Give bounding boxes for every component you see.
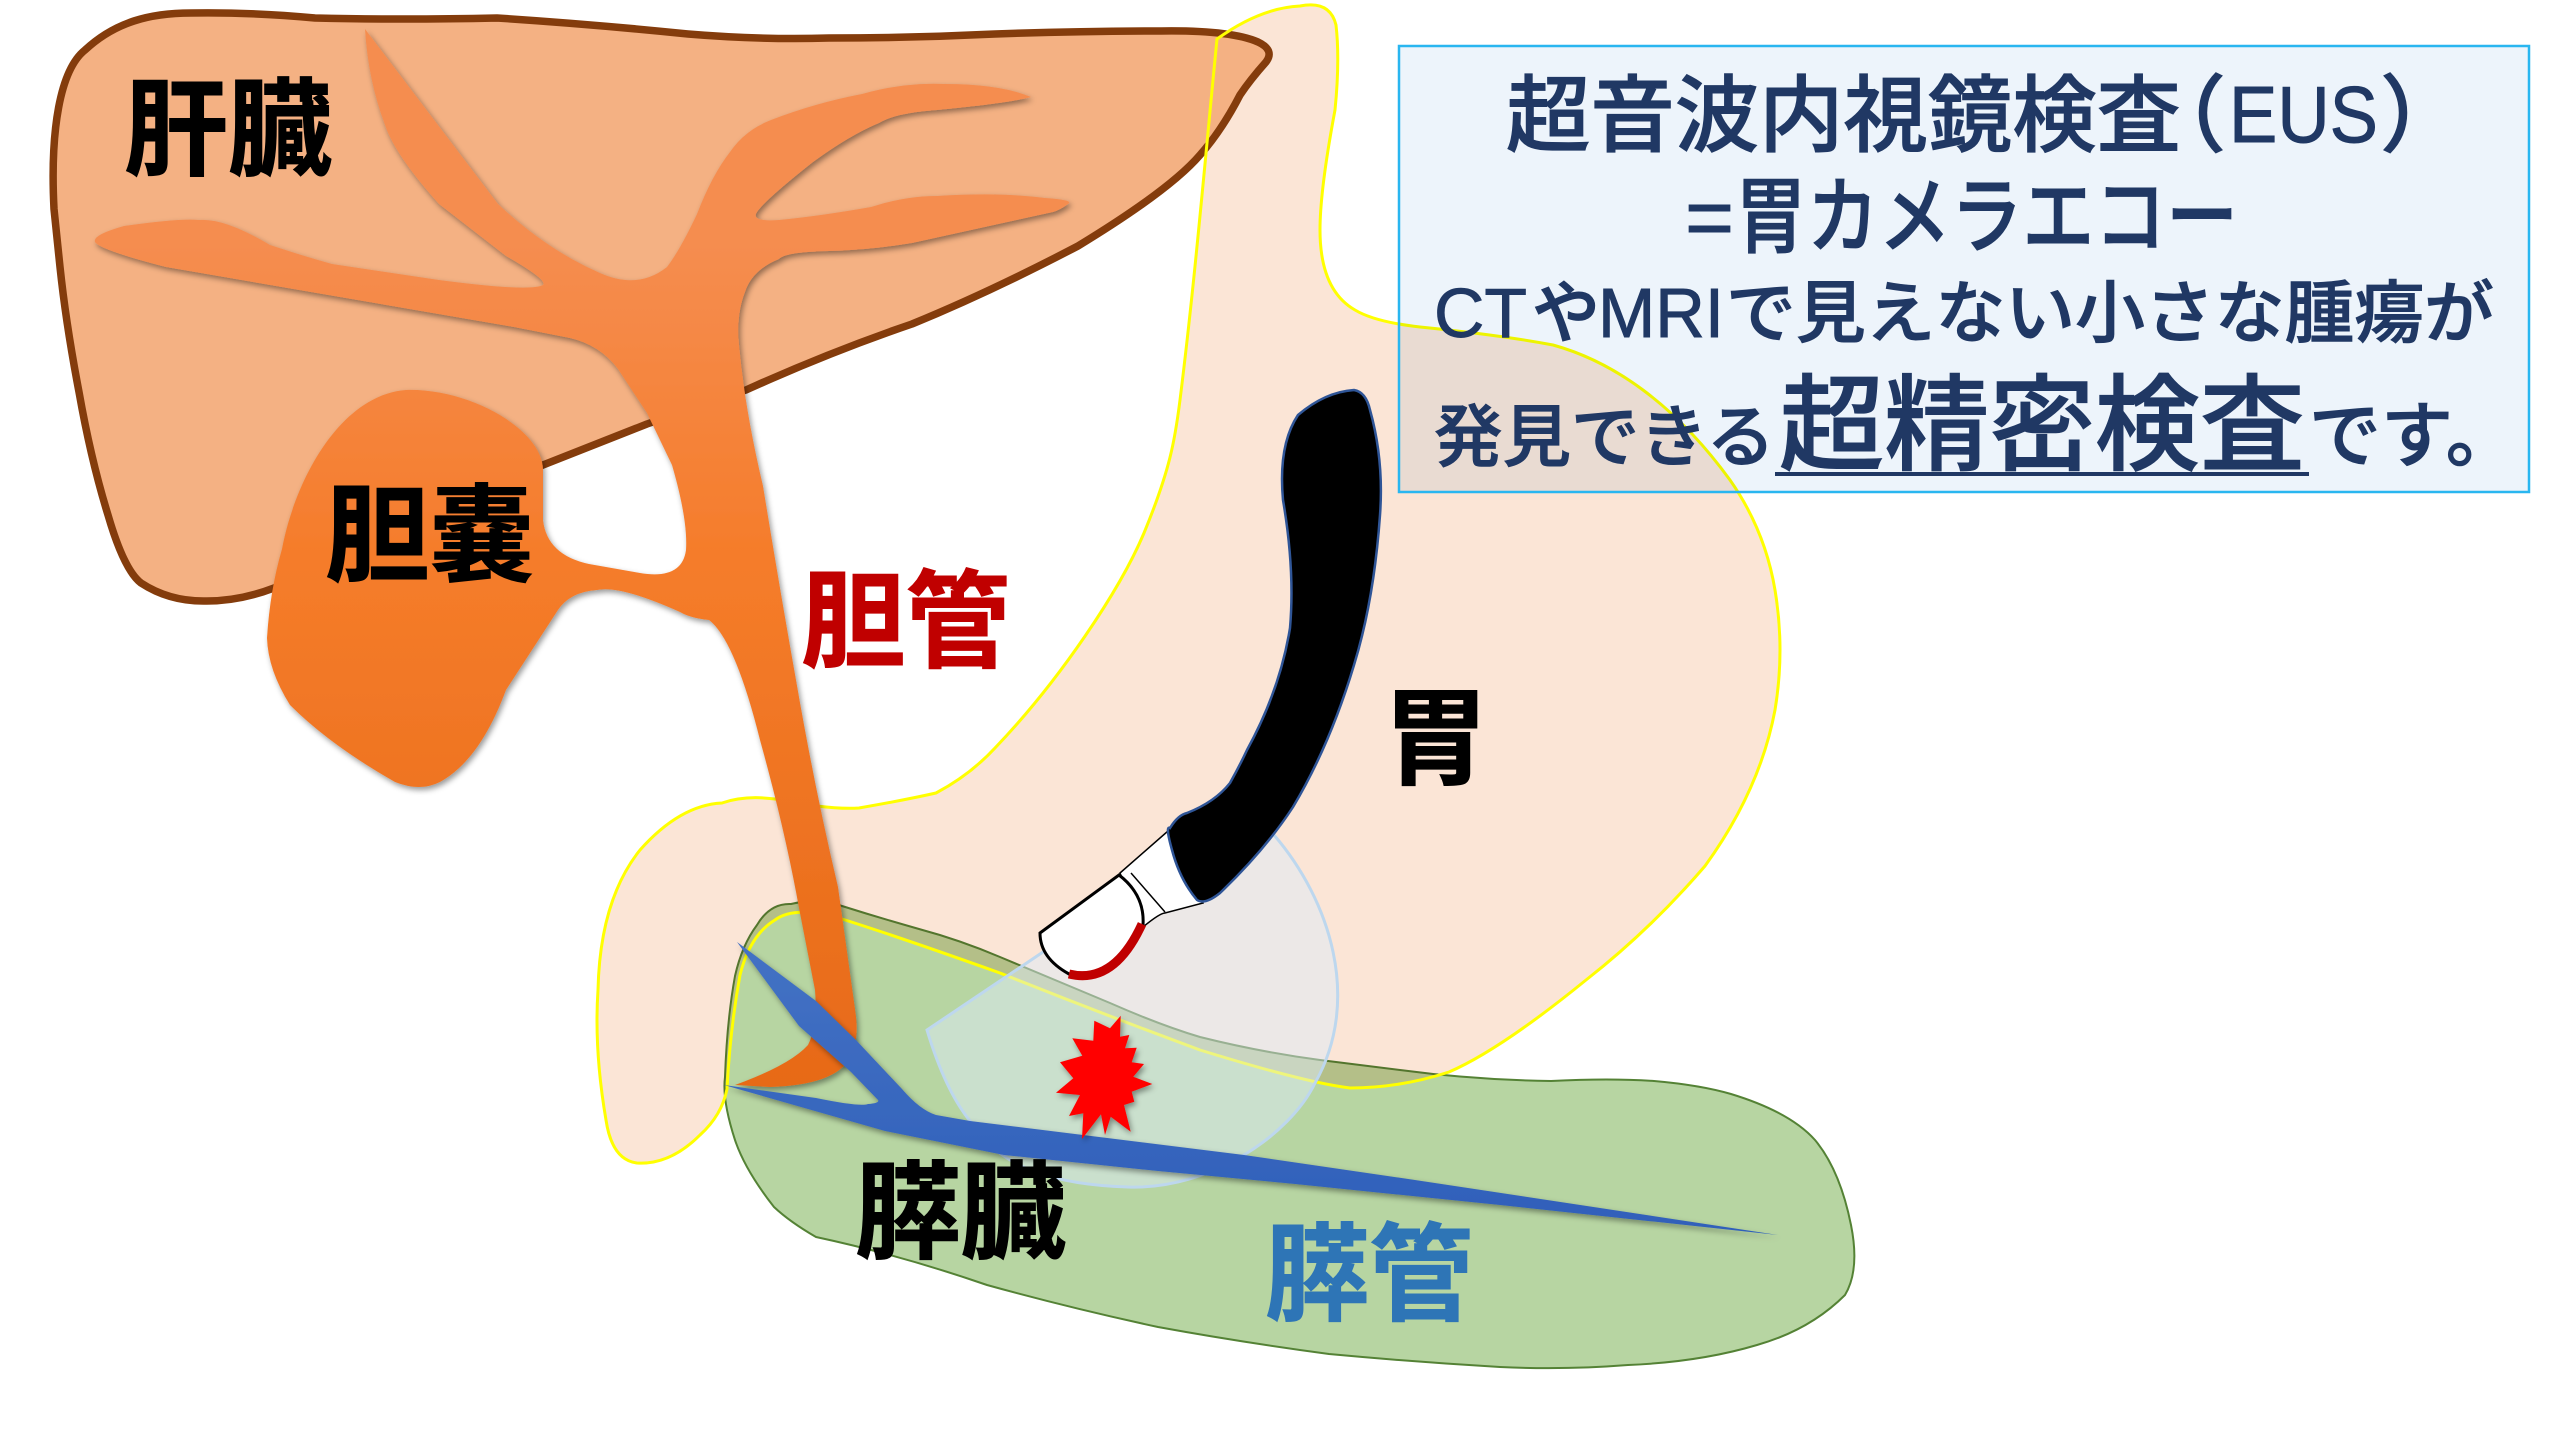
heading line 1: （ xyxy=(2142,69,2226,163)
endoscope neck xyxy=(1120,831,1203,927)
body line 3: MRI xyxy=(1598,274,1724,352)
heading line 2: = xyxy=(1685,170,1734,264)
label: bile duct: 胆管 xyxy=(801,564,1010,682)
body line 3: や xyxy=(1532,276,1600,352)
body line 4: 超精密検査 xyxy=(1779,368,2305,485)
body line 4: 発見できる xyxy=(1434,400,1775,476)
heading line 1: 超音波内視鏡検査 xyxy=(1506,69,2181,163)
info box xyxy=(1399,46,2529,492)
body line 4: です。 xyxy=(2309,397,2518,477)
label: stomach: 胃 xyxy=(1383,681,1489,799)
endoscope head xyxy=(1040,875,1143,976)
body line 4 xyxy=(1434,368,2518,485)
body line 3: CT xyxy=(1434,274,1527,352)
bile duct and gallbladder xyxy=(95,29,1069,1087)
pancreas xyxy=(724,901,1854,1368)
body line 3: で見えない小さな腫瘍が xyxy=(1726,276,2494,352)
heading line 2: 胃カメラエコー xyxy=(1735,170,2238,264)
pancreatic duct xyxy=(724,942,1778,1235)
endoscope xyxy=(1040,390,1381,976)
heading line 1: ） xyxy=(2380,69,2464,163)
label: liver: 肝臓 xyxy=(124,72,332,190)
stomach fill xyxy=(597,5,1780,1163)
label: gallbladder: 胆嚢 xyxy=(325,478,534,596)
ultrasound sector xyxy=(927,835,1338,1187)
label: pancreatic duct: 膵管 xyxy=(1265,1217,1473,1335)
liver xyxy=(53,13,1269,601)
stomach outline xyxy=(597,5,1780,1163)
label: pancreas: 膵臓 xyxy=(855,1155,1066,1273)
tumor xyxy=(1056,1016,1152,1139)
transducer xyxy=(1069,924,1142,976)
heading line 1: EUS xyxy=(2229,70,2378,159)
endoscope shaft xyxy=(1168,390,1381,901)
